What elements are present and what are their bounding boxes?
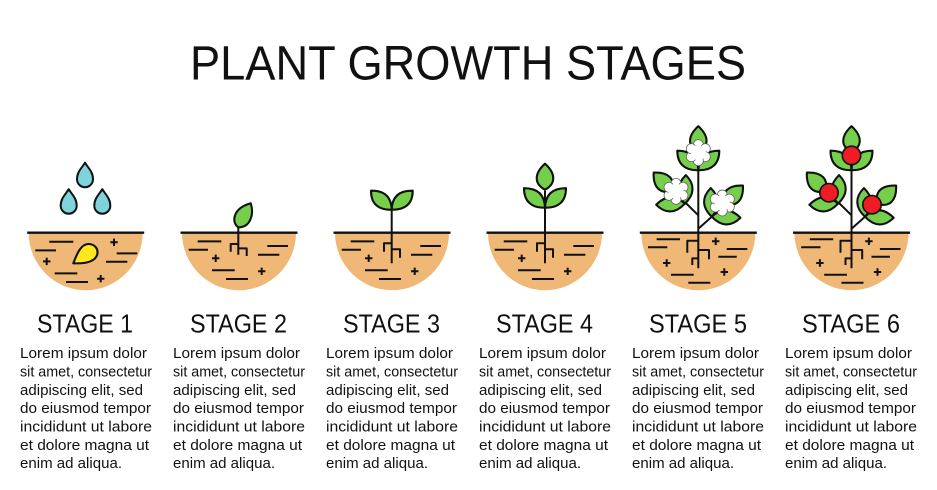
text block: stage 4: Lorem ipsum dolor	[479, 346, 606, 362]
text block: stage 5: incididunt ut labore	[632, 420, 764, 436]
text block: stage 6	[785, 346, 917, 472]
text block: stage 4: adipiscing elit, sed	[479, 383, 602, 399]
text block: stage 5: et dolore magna ut	[632, 438, 761, 454]
panel: stage 5	[632, 126, 764, 472]
text block: stage 2: incididunt ut labore	[173, 420, 305, 436]
heading: stage 2: STAGE 2	[190, 310, 287, 338]
text block: stage 3	[326, 346, 458, 472]
heading: stage 3: STAGE 3	[343, 310, 440, 338]
icon: seedling with two leaves	[334, 191, 450, 290]
icon: sprout with one leaf	[180, 203, 298, 290]
text block: stage 5: adipiscing elit, sed	[632, 383, 755, 399]
panel: stage 6	[785, 126, 917, 472]
text block: stage 6: sit amet, consectetur	[785, 364, 917, 380]
text block: stage 1: enim ad aliqua.	[20, 456, 122, 472]
text block: stage 3: adipiscing elit, sed	[326, 383, 449, 399]
text block: stage 3: et dolore magna ut	[326, 438, 455, 454]
text block: stage 3: do eiusmod tempor	[326, 401, 457, 417]
heading: stage 1: STAGE 1	[37, 310, 133, 338]
water drops	[61, 163, 110, 214]
text block: stage 1: et dolore magna ut	[20, 438, 149, 454]
heading: stage 4: STAGE 4	[496, 310, 593, 338]
panel: stage 3	[326, 191, 458, 472]
text block: stage 6: adipiscing elit, sed	[785, 383, 908, 399]
text block: stage 2: adipiscing elit, sed	[173, 383, 296, 399]
text block: stage 4: enim ad aliqua.	[479, 456, 581, 472]
text block: stage 2: do eiusmod tempor	[173, 401, 304, 417]
text block: stage 6: et dolore magna ut	[785, 438, 914, 454]
heading: stage 5: STAGE 5	[649, 310, 747, 338]
text block: stage 4: et dolore magna ut	[479, 438, 608, 454]
text block: stage 3: incididunt ut labore	[326, 420, 458, 436]
text block: stage 5	[632, 346, 764, 472]
text block: stage 3: sit amet, consectetur	[326, 364, 458, 380]
text block: stage 1: incididunt ut labore	[20, 420, 152, 436]
text block: stage 2: Lorem ipsum dolor	[173, 346, 300, 362]
text block: stage 4: sit amet, consectetur	[479, 364, 611, 380]
text block: stage 1: adipiscing elit, sed	[20, 383, 143, 399]
text block: stage 1: sit amet, consectetur	[20, 364, 152, 380]
soil with seed	[27, 233, 144, 290]
text block: stage 5: enim ad aliqua.	[632, 456, 734, 472]
text block: stage 5: do eiusmod tempor	[632, 401, 763, 417]
panel: stage 1	[20, 163, 152, 472]
text block: stage 2	[173, 346, 305, 472]
text block: stage 3: enim ad aliqua.	[326, 456, 428, 472]
heading: stage 6: STAGE 6	[802, 310, 900, 338]
text block: stage 4	[479, 346, 611, 472]
text block: stage 6: Lorem ipsum dolor	[785, 346, 912, 362]
text block: stage 6: do eiusmod tempor	[785, 401, 916, 417]
panel: stage 4	[479, 164, 611, 472]
icon: fruiting plant	[792, 126, 911, 290]
text block: stage 2: enim ad aliqua.	[173, 456, 275, 472]
text block: stage 1: Lorem ipsum dolor	[20, 346, 147, 362]
text block: stage 5: Lorem ipsum dolor	[632, 346, 759, 362]
icon: flowering plant	[639, 126, 758, 290]
text block: stage 6: enim ad aliqua.	[785, 456, 887, 472]
text block: stage 4: do eiusmod tempor	[479, 401, 610, 417]
text block: stage 2: sit amet, consectetur	[173, 364, 305, 380]
icon: water drops and seed in soil	[27, 163, 144, 290]
text block: stage 5: sit amet, consectetur	[632, 364, 764, 380]
text block: stage 1: do eiusmod tempor	[20, 401, 151, 417]
title: PLANT GROWTH STAGES	[190, 38, 746, 90]
text block: stage 6: incididunt ut labore	[785, 420, 917, 436]
icon: seedling with three leaves	[486, 164, 604, 290]
text block: stage 3: Lorem ipsum dolor	[326, 346, 453, 362]
panel: stage 2	[173, 203, 305, 472]
text block: stage 4: incididunt ut labore	[479, 420, 611, 436]
text block: stage 1	[20, 346, 152, 472]
text block: stage 2: et dolore magna ut	[173, 438, 302, 454]
